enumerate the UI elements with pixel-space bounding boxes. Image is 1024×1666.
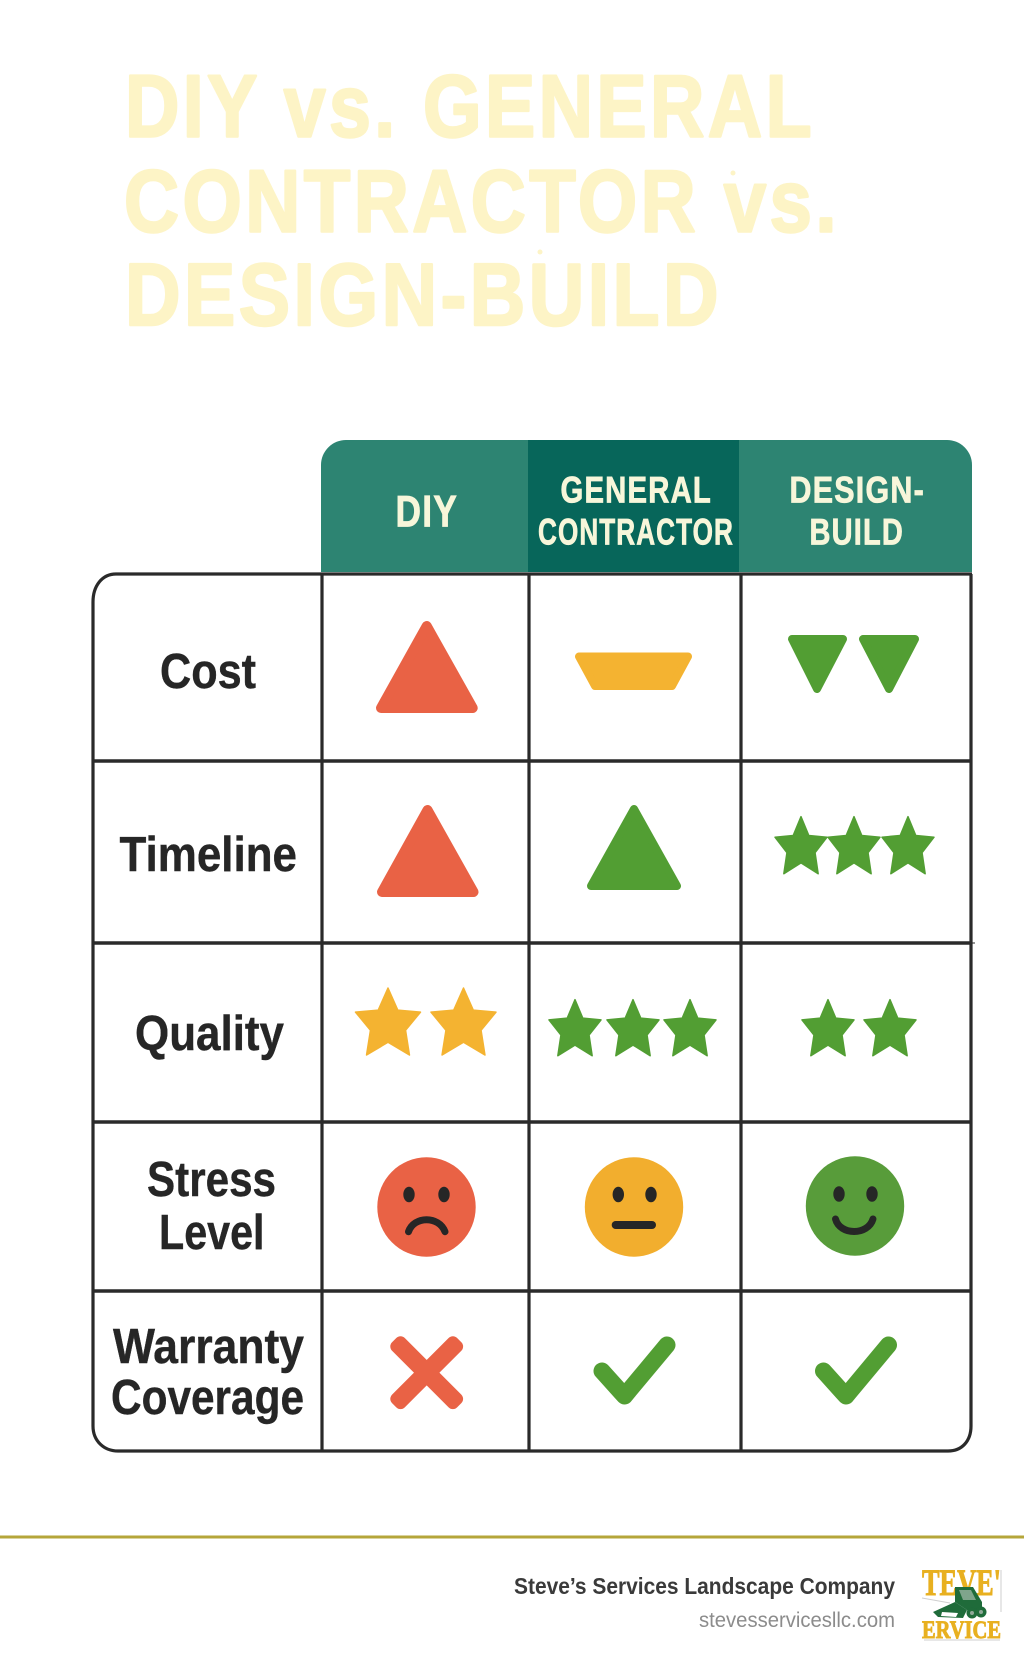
label: Stress Level	[147, 1153, 276, 1260]
label: Stress Level: Level	[159, 1206, 264, 1260]
label: Warranty Coverage	[111, 1320, 304, 1425]
icon: red up triangle	[381, 626, 473, 708]
header: Design-Build: BUILD	[810, 512, 904, 552]
table grid	[93, 574, 975, 1451]
icon: red cross	[362, 1308, 492, 1438]
icon: yellow trapezoid	[579, 656, 688, 686]
header: Design-Build: DESIGN-	[790, 470, 925, 510]
header: General Contractor	[538, 470, 734, 552]
title	[124, 56, 840, 344]
label: Stress Level: Stress	[147, 1153, 276, 1207]
header: General Contractor: CONTRACTOR	[538, 512, 734, 552]
header: DIY: DIY	[396, 488, 458, 536]
table header	[321, 440, 972, 572]
title: CONTRACTOR vs.	[124, 152, 840, 251]
icon: green up triangle	[591, 809, 677, 886]
icon: two green down triangles	[792, 639, 915, 689]
icon: three green stars	[549, 1000, 716, 1056]
icon: green check	[602, 1345, 667, 1396]
title: DIY vs. GENERAL	[125, 56, 815, 156]
header: Design-Build	[790, 470, 925, 552]
label: Cost: Cost	[160, 645, 256, 699]
label: Timeline: Timeline	[120, 828, 297, 882]
icon: skid-steer loader	[933, 1587, 986, 1618]
row: cost icons	[381, 626, 915, 708]
icon: neutral face	[585, 1157, 683, 1257]
website: stevesservicesllc.com	[699, 1609, 895, 1632]
row: quality icons	[356, 988, 916, 1056]
logo	[922, 1563, 1001, 1644]
icon: three green stars	[775, 817, 934, 874]
logo: ERVICE	[922, 1617, 1001, 1644]
label: Quality: Quality	[135, 1007, 284, 1061]
company name: Steve’s Services Landscape Company	[514, 1573, 895, 1599]
icon: red up triangle	[382, 810, 474, 892]
footer	[0, 1536, 1024, 1644]
row: timeline icons	[382, 809, 934, 892]
icon: green check	[824, 1345, 888, 1396]
header: General Contractor: GENERAL	[560, 470, 712, 510]
icon: smiling face	[806, 1156, 904, 1256]
label: Warranty Coverage: Warranty	[113, 1320, 304, 1374]
label: Warranty Coverage: Coverage	[111, 1371, 304, 1425]
row labels	[111, 645, 304, 1425]
icon: two green stars	[802, 1000, 916, 1056]
row: warranty icons	[362, 1308, 888, 1438]
comparison table	[93, 440, 975, 1451]
row: stress icons	[377, 1156, 904, 1257]
icon: two yellow stars	[356, 988, 496, 1055]
icon: frowning face	[377, 1157, 476, 1257]
title: DESIGN-BUILD	[125, 245, 722, 344]
